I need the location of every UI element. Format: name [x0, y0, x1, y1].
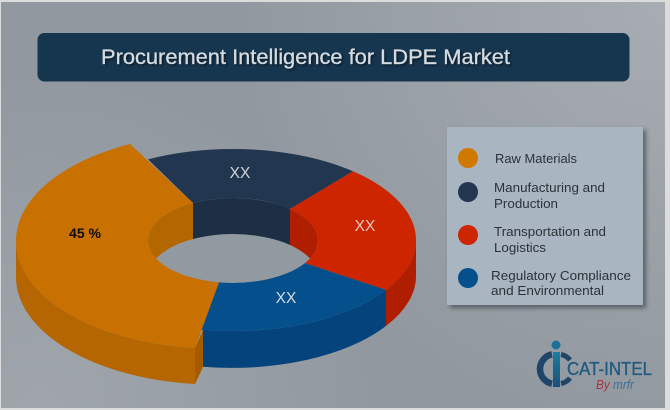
legend item: Transportation and Logistics: Logistics [494, 241, 546, 255]
logo icon [540, 340, 570, 387]
logo text: CAT-INTEL [567, 359, 652, 379]
3D donut chart [16, 144, 416, 384]
legend item: Transportation and Logistics: Transportation and [494, 225, 606, 239]
legend item: Regulatory Compliance and Environmental: and Environmental [491, 284, 604, 298]
logo: CAT-INTEL by mrfr [540, 340, 652, 392]
legend item: Raw Materials: Raw Materials [495, 152, 577, 166]
red segment [290, 171, 416, 290]
legend item: Manufacturing and Production [458, 181, 605, 211]
navy segment [148, 149, 353, 209]
legend item: Regulatory Compliance and Environmental: Regulatory Compliance [491, 269, 631, 283]
inner walls of the donut hole [148, 198, 318, 283]
orange outer wall [16, 241, 195, 384]
blue segment [200, 263, 386, 331]
legend item: Manufacturing and Production: Manufacturing and [494, 181, 605, 195]
donut hole [156, 234, 310, 283]
label: red XX: XX [355, 218, 376, 235]
legend panel [447, 127, 643, 305]
legend item: Manufacturing and Production: Production [494, 197, 558, 211]
orange cut face [195, 330, 203, 384]
label: 45 %: 45 % [69, 225, 102, 241]
legend item: Transportation and Logistics [458, 225, 606, 255]
title banner [38, 33, 630, 82]
red outer wall [386, 240, 416, 326]
title: Procurement Intelligence for LDPE Market [101, 46, 510, 69]
legend item: Raw Materials [458, 148, 577, 168]
label: navy XX: XX [230, 165, 251, 182]
logo tagline: By mrfr [596, 377, 635, 392]
label: blue XX: XX [276, 290, 297, 307]
orange segment [16, 144, 219, 348]
blue outer wall [203, 290, 386, 368]
legend item: Regulatory Compliance and Environmental [458, 268, 631, 298]
